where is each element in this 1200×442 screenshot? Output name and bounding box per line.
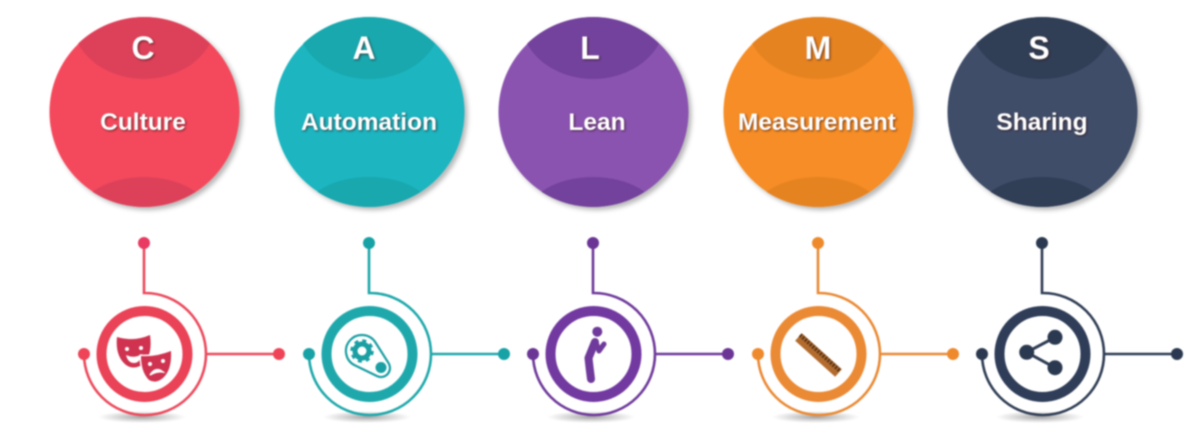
- panel: Sharing circle: Sharing: [996, 109, 1088, 136]
- panel: Lean circle: L: [580, 30, 600, 66]
- panel: Culture circle: Culture: [100, 109, 186, 136]
- panel: Measurement circle: Measurement: [738, 109, 896, 136]
- panel: Lean circle: Lean: [568, 109, 626, 136]
- panel: Automation connector and icon: [303, 237, 510, 423]
- panel: Sharing connector and icon: [976, 237, 1183, 423]
- panel: Automation circle: [273, 16, 470, 213]
- panel: Culture circle: [48, 16, 246, 213]
- panel: Lean circle: [498, 16, 694, 213]
- icon: theatre masks: [117, 335, 171, 382]
- panel: Culture connector and icon: [78, 237, 285, 423]
- panel: Automation circle: A: [352, 30, 376, 66]
- icon: ruler: [798, 335, 840, 373]
- panel: Sharing circle: S: [1028, 30, 1050, 66]
- icon: bowing person: [588, 327, 604, 379]
- panel: Automation circle: Automation: [301, 109, 437, 136]
- panel: Measurement circle: M: [805, 30, 831, 66]
- panel: Culture circle: C: [131, 30, 155, 66]
- panel: Measurement circle: [722, 16, 920, 213]
- panel: Measurement connector and icon: [752, 237, 959, 423]
- icon: share nodes: [1019, 330, 1062, 375]
- icon: gear and belt: [346, 335, 390, 377]
- panel: Lean connector and icon: [527, 237, 734, 423]
- panel: Sharing circle: [946, 16, 1144, 213]
